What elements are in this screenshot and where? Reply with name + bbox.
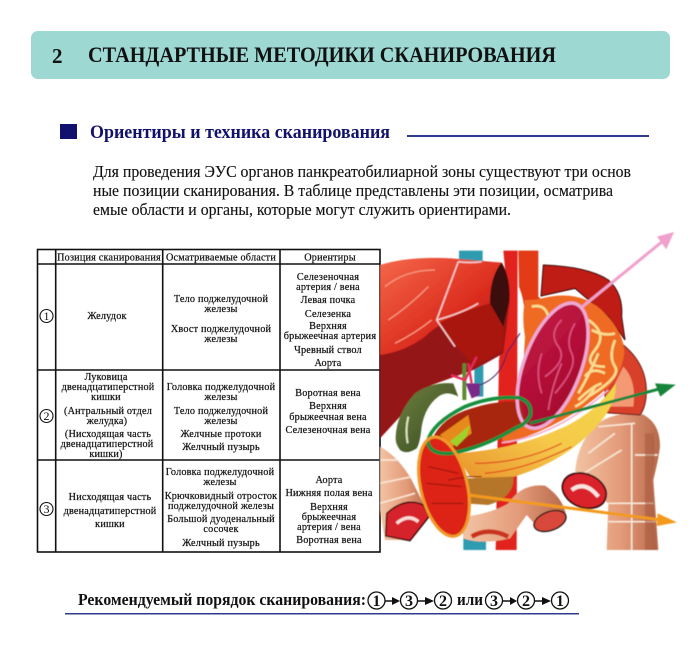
stomach folds [532, 306, 616, 407]
order digits: 3 [490, 593, 498, 610]
row 2: желудка) [86, 416, 127, 427]
row 1: Желудок [87, 311, 127, 322]
duodenal folds [427, 467, 482, 503]
row 3: Нижняя полая вена [285, 488, 373, 499]
bile ducts [451, 333, 520, 400]
table header row: Осматриваемые области [166, 252, 276, 264]
table header row [57, 252, 356, 264]
row 1: Хвост поджелудочной [171, 324, 271, 335]
stomach back fundus [541, 265, 625, 340]
stomach lower rim [502, 390, 608, 443]
row 2: Головка поджелудочной [167, 382, 276, 393]
subheading [60, 123, 649, 143]
row 3: Головка поджелудочной [166, 467, 275, 478]
row 1 [40, 272, 376, 369]
section number: 2 [52, 44, 62, 68]
gallbladder highlight [406, 417, 408, 443]
intro paragraph: емые области и органы, которые могут служить ориентирами. [93, 200, 511, 219]
stomach body [502, 295, 624, 443]
pancreas [455, 383, 616, 482]
order digits: 3 [405, 593, 413, 610]
gallbladder [396, 383, 458, 452]
table header row: Ориентиры [304, 252, 356, 264]
order arrows [385, 597, 551, 605]
arrow: green position 2 [530, 383, 676, 423]
row 3: 3 [44, 502, 50, 516]
intro paragraph: ные позиции сканирования. В таблице представлены эти позиции, осматрива [93, 181, 614, 200]
falciform ligament [437, 262, 482, 347]
row 3 [40, 467, 373, 549]
row 3: Нисходящая часть [69, 492, 151, 503]
small intestine loop [463, 485, 569, 542]
row 2: железы [203, 416, 238, 427]
table header row: Позиция сканирования [57, 252, 161, 264]
recommended scanning order [65, 590, 579, 614]
order label: Рекомендуемый порядок сканирования: [78, 590, 366, 609]
orange scanning ring, position 3 [410, 432, 478, 541]
row 1: Селезеночная [297, 272, 359, 283]
row 2: кишки [91, 392, 121, 403]
row 1: брыжеечная артерия [284, 331, 376, 342]
gastric mucosa [503, 294, 603, 438]
row 3: сосочек [203, 524, 239, 535]
row 3: Желчный пузырь [182, 538, 260, 549]
icon: square bullet [60, 124, 77, 139]
row 2: Желчный пузырь [182, 442, 260, 453]
row 1: Селезенка [305, 309, 351, 320]
row 2: двенадцатиперстной [62, 382, 155, 393]
liver highlights [385, 270, 435, 343]
aorta [496, 251, 518, 550]
row 1: железы [203, 304, 238, 315]
row 2: кишки) [89, 449, 123, 460]
arrow: orange position 3 [468, 495, 677, 526]
colon [575, 413, 660, 550]
row 1: Тело поджелудочной [174, 294, 268, 305]
row 1: артерия / вена [296, 282, 360, 293]
arrow: pink position 1 [582, 232, 674, 307]
row 2: двенадцатиперстной [61, 439, 154, 450]
duodenum [410, 432, 478, 541]
row 1: Верхняя [309, 321, 347, 332]
green scanning ring, position 2 [428, 397, 531, 454]
header banner [31, 31, 670, 79]
order circles [368, 592, 568, 609]
order rule [65, 613, 579, 614]
order digits [372, 593, 564, 610]
row 2: Тело поджелудочной [174, 406, 268, 417]
table grid [38, 250, 380, 552]
liver mid shading [438, 303, 503, 367]
stomach greater curvature [605, 345, 646, 415]
row 1: Аорта [314, 358, 342, 369]
pancreatic head [465, 477, 513, 505]
subheading text: Ориентиры и техника сканирования [90, 123, 390, 143]
mucosal folds [538, 320, 575, 410]
row 2: брыжеечная вена [289, 412, 367, 423]
row 2: Воротная вена [295, 388, 361, 399]
row 2: Луковица [84, 372, 128, 383]
row 2: Селезеночная вена [286, 425, 371, 436]
pink scanning ring, position 1 [503, 294, 603, 438]
gastric antrum [432, 401, 526, 452]
order digits: 1 [372, 593, 380, 610]
row 2: (Антральный отдел [64, 406, 152, 417]
row 2 [40, 372, 371, 460]
order digits: 2 [522, 593, 530, 610]
row 3: артерия / вена [297, 522, 361, 533]
intro paragraph: Для проведения ЭУС органов панкреатобилиарной зоны существуют три основ [93, 162, 631, 181]
scanning positions table [38, 250, 380, 552]
liver upper lobe [380, 258, 502, 355]
row 3: Крючковидный отросток [165, 491, 277, 502]
cut bowel end right [557, 467, 612, 515]
row 1: Чревный ствол [294, 345, 362, 356]
row 1: железы [203, 334, 238, 345]
row 3: Большой дуоденальный [167, 514, 275, 525]
row 1: Левая почка [301, 295, 356, 306]
row 1: 1 [44, 309, 50, 323]
jejunum left [380, 447, 429, 541]
esophagus [518, 251, 542, 337]
row 2: Желчные протоки [180, 429, 262, 440]
row 3: кишки [95, 519, 125, 530]
intro paragraph [93, 162, 631, 219]
order conjunction: или [457, 590, 483, 609]
order digits: 2 [439, 593, 447, 610]
pancreas veins [475, 443, 572, 473]
row 3: брыжеечная [302, 512, 356, 523]
subheading rule [407, 135, 649, 137]
inferior vena cava [459, 251, 486, 550]
page title: СТАНДАРТНЫЕ МЕТОДИКИ СКАНИРОВАНИЯ [88, 42, 556, 67]
row 3: Воротная вена [296, 535, 362, 546]
liver silhouette dark base [380, 263, 510, 438]
row 2: 2 [44, 409, 50, 423]
row 3: Верхняя [310, 502, 348, 513]
row 3: двенадцатиперстной [64, 506, 157, 517]
anatomy illustration [380, 232, 677, 550]
row 2: Верхняя [309, 401, 347, 412]
order digits: 1 [556, 593, 564, 610]
row 2: железы [203, 392, 238, 403]
row 3: Аорта [316, 475, 343, 486]
row 3: железы [202, 477, 237, 488]
row 2: (Нисходящая часть [65, 429, 151, 440]
row 3: поджелудочной железы [168, 501, 274, 512]
